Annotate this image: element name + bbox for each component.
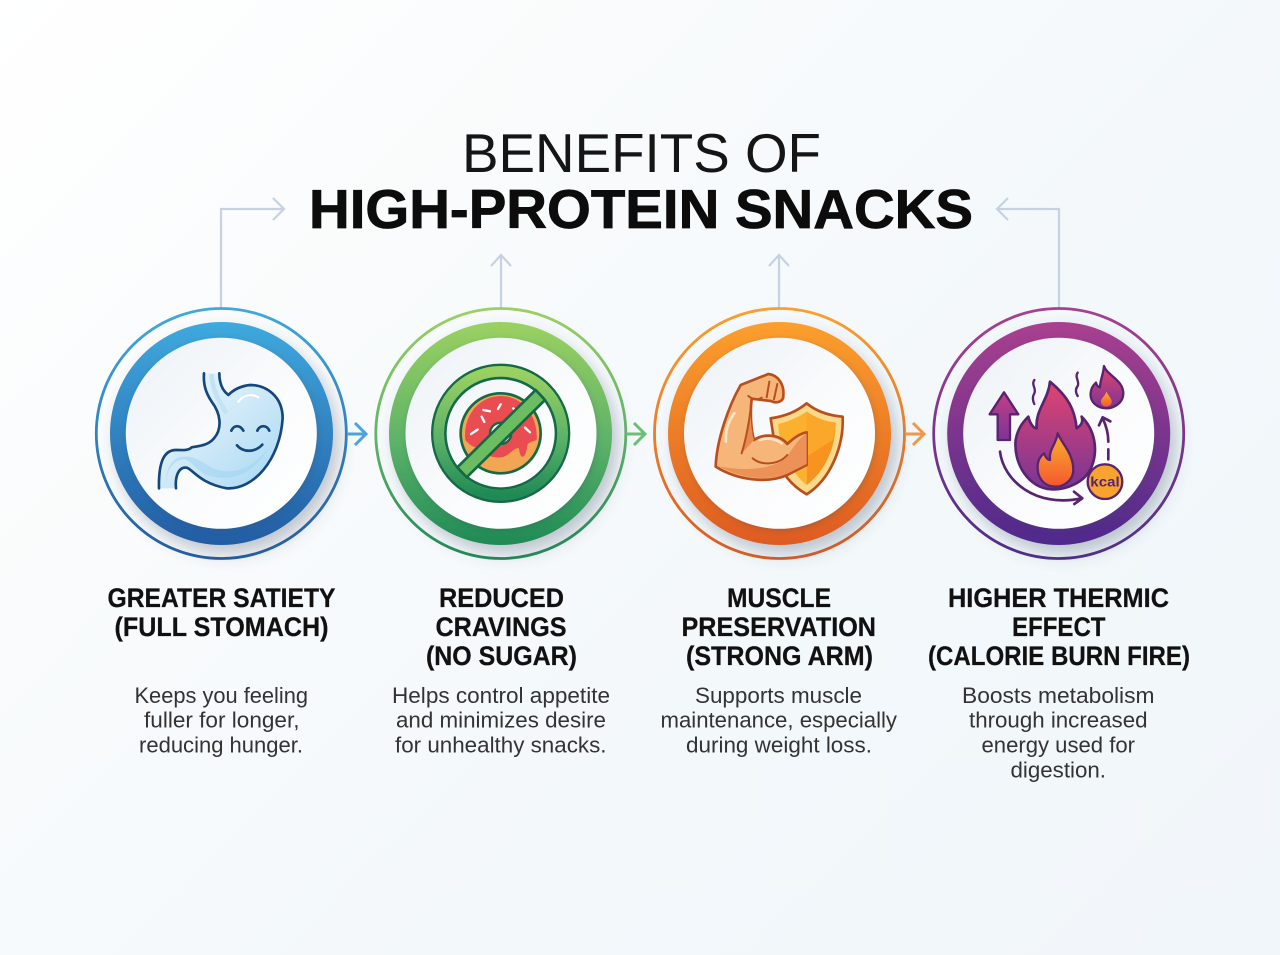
description: and minimizes desire [396, 708, 606, 732]
description [660, 683, 897, 758]
description [392, 683, 610, 758]
panel: muscle preservation [654, 308, 924, 758]
icon: calorie burn fire [990, 366, 1123, 504]
arrow: to next step [347, 423, 366, 445]
description: Supports muscle [695, 683, 862, 708]
title: HIGH-PROTEIN SNACKS [309, 178, 973, 240]
badge: blue ring [96, 308, 346, 558]
heading: CRAVINGS [436, 612, 566, 642]
heading: MUSCLE [727, 583, 831, 613]
description: for unhealthy snacks. [395, 732, 606, 758]
description: digestion. [1010, 758, 1106, 782]
badge: orange ring [654, 308, 904, 558]
heading [682, 583, 876, 671]
title [309, 122, 973, 240]
icon: calorie burn fire: kcal [1090, 474, 1120, 490]
heading: (FULL STOMACH) [114, 612, 328, 642]
description: Helps control appetite [392, 683, 610, 708]
heading [426, 583, 577, 671]
description: maintenance, especially [660, 708, 897, 732]
description [962, 683, 1154, 782]
description: through increased [969, 708, 1148, 732]
description: Keeps you feeling [134, 683, 308, 708]
panel: higher thermic effect [928, 308, 1190, 782]
arrow: to next step [905, 423, 924, 445]
arrow: thermic to title [997, 198, 1059, 308]
description: reducing hunger. [139, 732, 303, 758]
description: Boosts metabolism [962, 683, 1154, 708]
arrow: cravings to title [491, 255, 511, 308]
arrow: to next step [626, 423, 645, 445]
icon: crossed-out donut [432, 365, 569, 502]
heading: PRESERVATION [682, 612, 876, 642]
title: BENEFITS OF [462, 122, 821, 184]
heading: HIGHER THERMIC [948, 583, 1169, 613]
badge: purple ring [934, 308, 1184, 558]
heading: (STRONG ARM) [686, 641, 873, 671]
heading: GREATER SATIETY [108, 583, 336, 613]
panel: reduced cravings [376, 308, 645, 758]
heading [928, 583, 1190, 671]
arrow: satiety to title [221, 198, 284, 308]
heading: EFFECT [1012, 612, 1106, 642]
icon: flexed arm and shield [716, 374, 843, 494]
heading: REDUCED [439, 583, 564, 613]
description [134, 683, 308, 758]
description: during weight loss. [686, 732, 872, 758]
heading [108, 583, 336, 642]
heading: (NO SUGAR) [426, 641, 577, 671]
description: fuller for longer, [144, 708, 300, 732]
arrow: muscle to title [769, 255, 789, 308]
icon: smiling stomach [159, 373, 283, 488]
description: energy used for [982, 732, 1135, 758]
badge: green ring [376, 308, 626, 558]
panel: greater satiety [96, 308, 366, 758]
heading: (CALORIE BURN FIRE) [928, 641, 1190, 671]
